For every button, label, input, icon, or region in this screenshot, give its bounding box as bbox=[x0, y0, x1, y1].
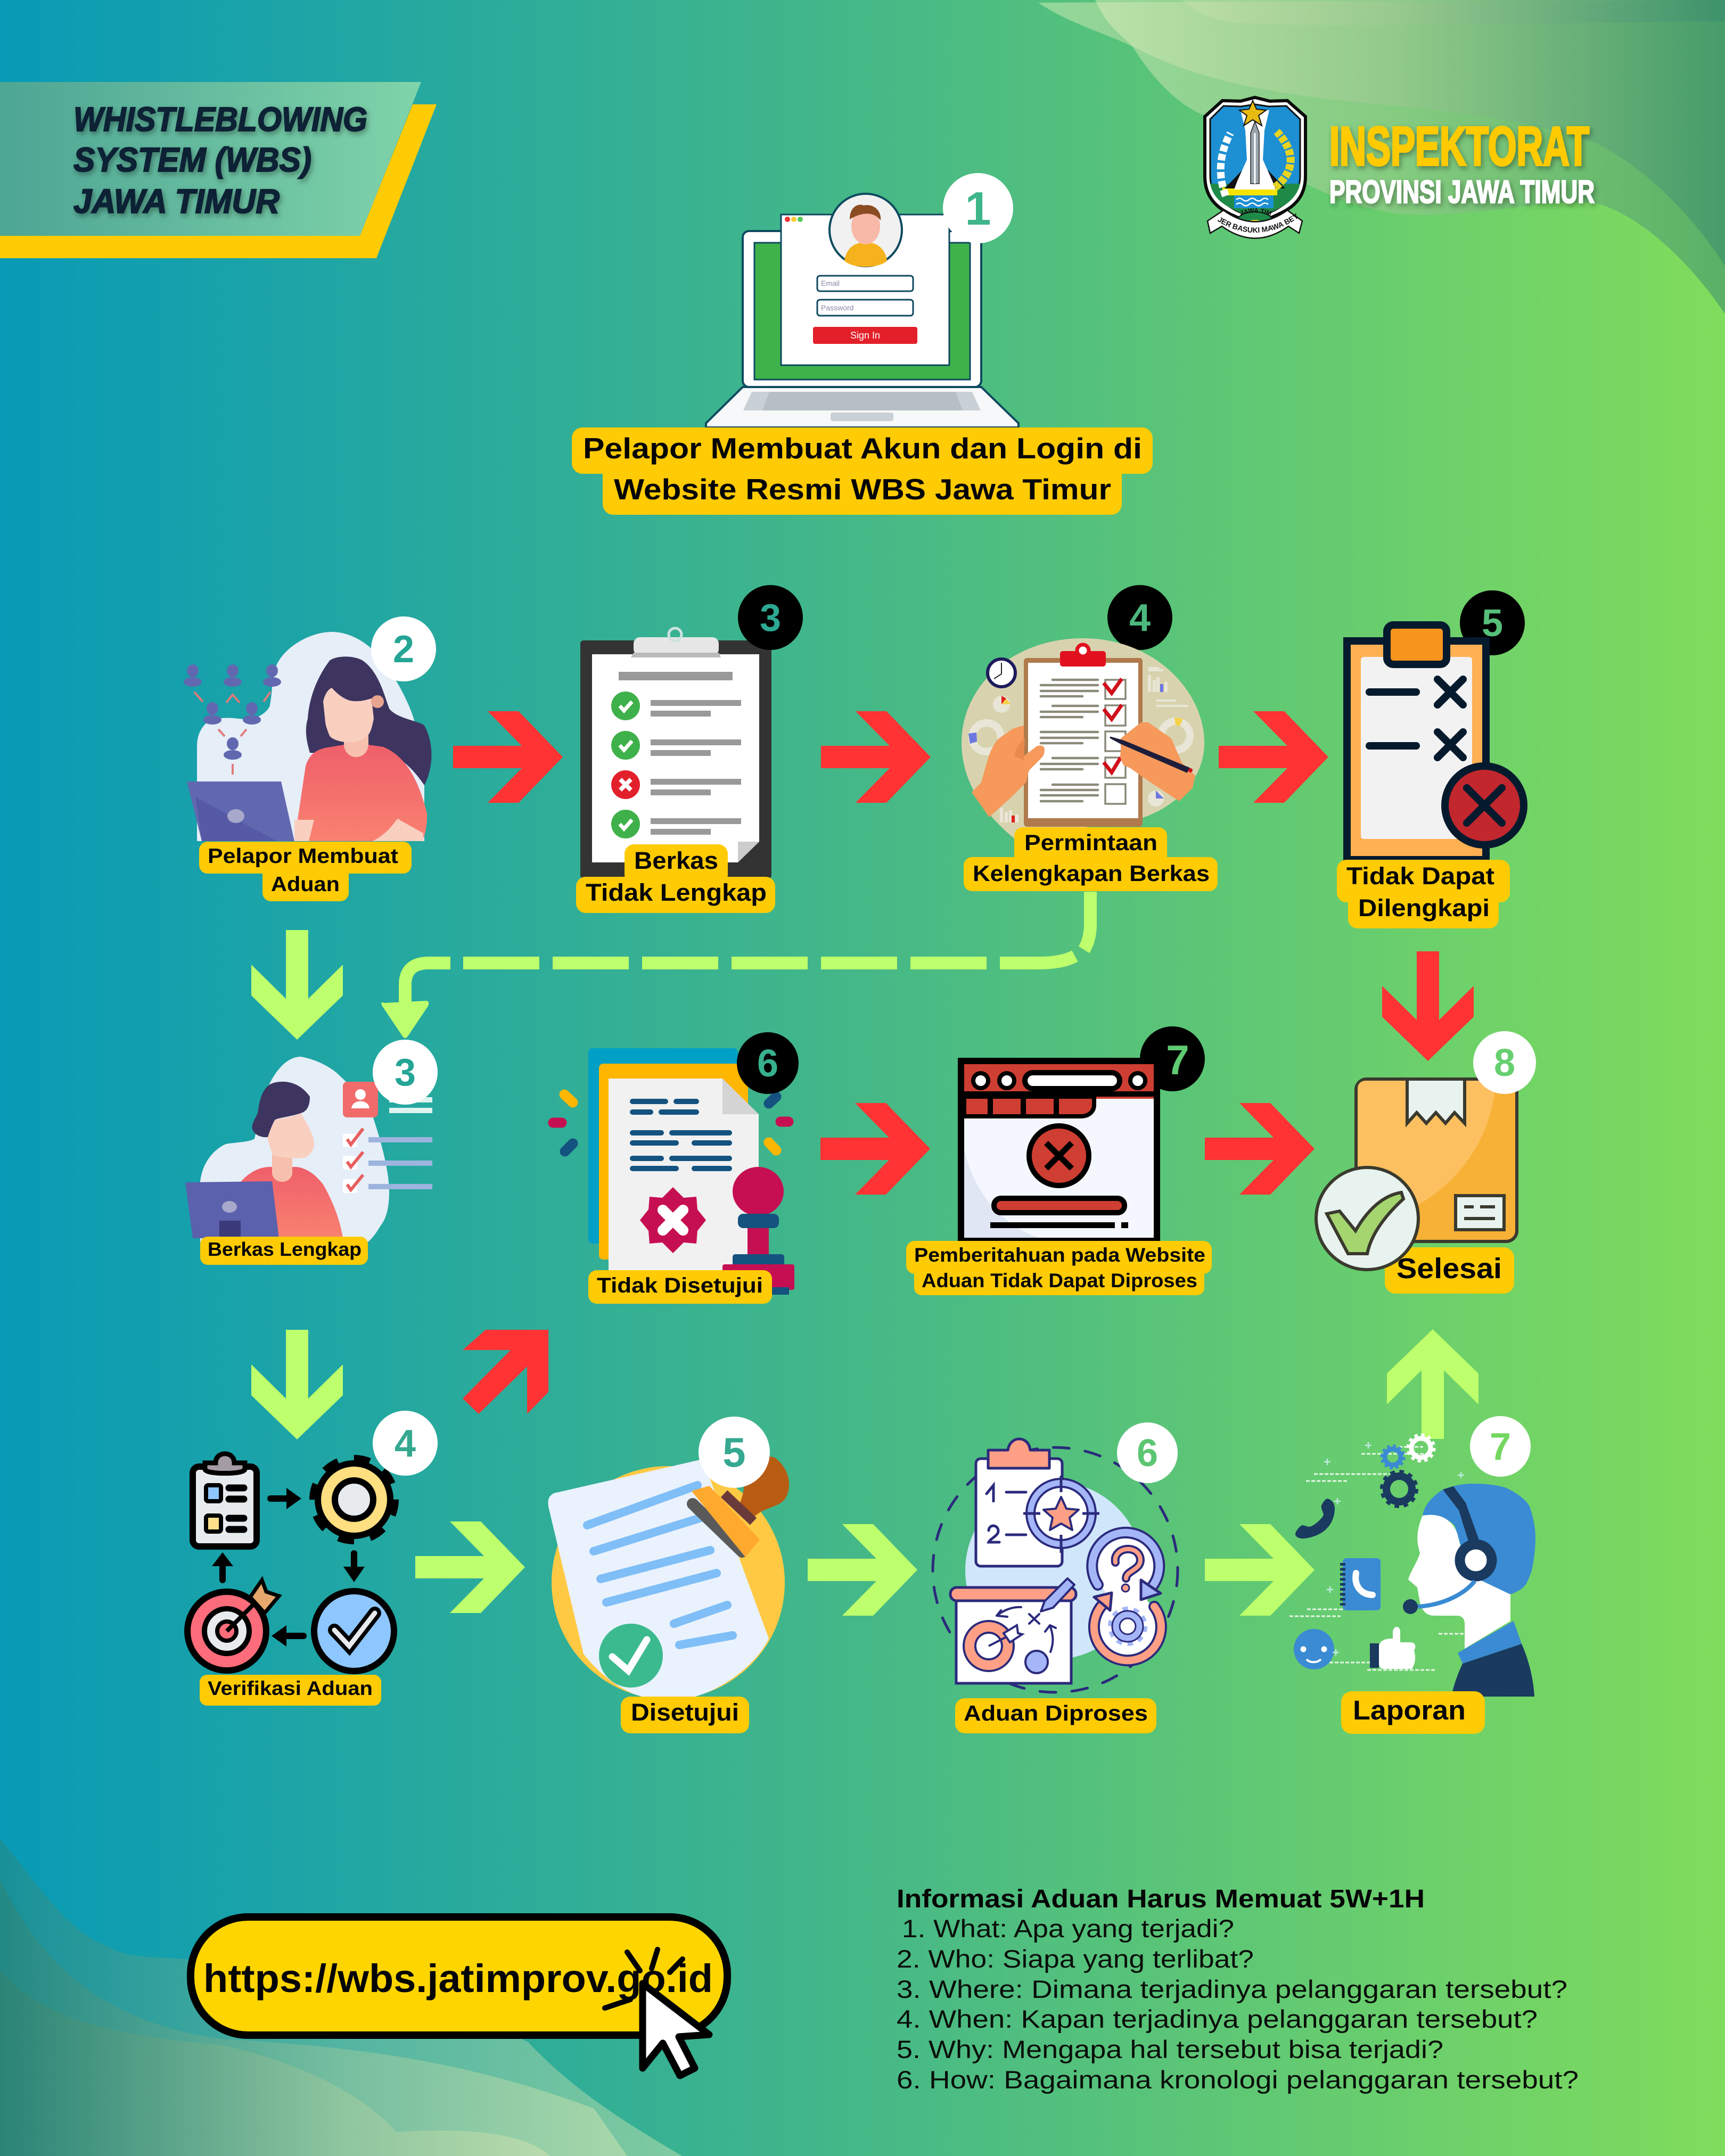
badge 1: 1 bbox=[965, 182, 991, 235]
checklist rows bbox=[651, 700, 741, 835]
title banner bbox=[0, 82, 437, 258]
strategy board bbox=[950, 1578, 1076, 1683]
smiley bbox=[1294, 1629, 1334, 1669]
document lines bbox=[632, 1101, 729, 1168]
cycle question and gear bbox=[1092, 1532, 1161, 1660]
dashed arrow: permintaan back to berkas lengkap bbox=[381, 892, 1090, 1038]
badge 4 white bbox=[373, 1411, 438, 1476]
label: tidak disetujui bbox=[588, 1270, 772, 1304]
organisation name bbox=[1329, 116, 1595, 210]
check bbox=[314, 1591, 394, 1671]
step 4 icon: document request bbox=[962, 638, 1204, 838]
label: pemberitahuan: Pemberitahuan pada Website bbox=[914, 1244, 1205, 1266]
badge 6 white: 6 bbox=[1137, 1432, 1158, 1475]
label: aduan diproses: Aduan Diproses bbox=[964, 1701, 1148, 1725]
list of questions: 1. What: Apa yang terjadi? bbox=[902, 1914, 1234, 1943]
label: tidak disetujui: Tidak Disetujui bbox=[597, 1274, 763, 1297]
clipboard bbox=[193, 1454, 257, 1546]
list of questions bbox=[897, 1914, 1579, 2094]
rosette reject mark bbox=[640, 1187, 706, 1253]
label: laporan: Laporan bbox=[1353, 1695, 1466, 1725]
logo: East Java shield bbox=[1203, 96, 1307, 239]
badge 2 bbox=[371, 616, 436, 681]
label: disetujui bbox=[621, 1697, 749, 1733]
stamp bbox=[692, 1456, 789, 1557]
badge 3 black: 3 bbox=[760, 597, 781, 639]
badge 5 black bbox=[1460, 590, 1525, 655]
dashed lines bbox=[1289, 1447, 1464, 1670]
title text: SYSTEM (WBS) bbox=[73, 141, 311, 179]
label: verifikasi aduan bbox=[200, 1675, 381, 1706]
list of questions: 5. Why: Mengapa hal tersebut bisa terjadi? bbox=[897, 2035, 1443, 2063]
background charts bbox=[968, 668, 1190, 822]
badge 4 white: 4 bbox=[395, 1422, 416, 1465]
list of questions: 6. How: Bagaimana kronologi pelanggaran tersebut? bbox=[897, 2066, 1579, 2094]
decorative wave: bottom left bbox=[0, 1838, 682, 2156]
step 4 icon: verification cycle bbox=[187, 1454, 394, 1671]
badge 7 black: 7 bbox=[1166, 1036, 1189, 1083]
website url button: https://wbs.jatimprov.go.id bbox=[203, 1956, 713, 2001]
arrow: verifikasi to disetujui bbox=[415, 1521, 525, 1613]
label: berkas tidak lengkap: Tidak Lengkap bbox=[586, 879, 767, 906]
organisation name: PROVINSI JAWA TIMUR bbox=[1329, 174, 1595, 210]
arrow: step 2 to berkas tidak lengkap bbox=[453, 711, 563, 803]
thumbs up bbox=[1370, 1627, 1415, 1669]
badge 8: 8 bbox=[1494, 1042, 1515, 1084]
sparks bbox=[553, 1095, 788, 1151]
badge 4 black bbox=[1107, 585, 1172, 650]
label: selesai: Selesai bbox=[1397, 1253, 1502, 1285]
label: tidak dapat dilengkapi: Dilengkapi bbox=[1358, 894, 1490, 921]
login fields: Password bbox=[821, 303, 853, 312]
list of questions: 2. Who: Siapa yang terlibat? bbox=[897, 1945, 1254, 1973]
arrow: step 2 down to berkas lengkap bbox=[251, 930, 343, 1040]
badge 1 bbox=[943, 173, 1013, 243]
label: step 2: Aduan bbox=[271, 873, 340, 896]
login fields: Email bbox=[821, 279, 840, 287]
title text: JAWA TIMUR bbox=[73, 182, 280, 220]
website url button bbox=[191, 1917, 727, 2076]
checklist bbox=[343, 1129, 432, 1193]
label: step 1: Website Resmi WBS Jawa Timur bbox=[614, 473, 1111, 506]
arrow: to pemberitahuan bbox=[820, 1103, 930, 1195]
badge 6 white bbox=[1117, 1422, 1178, 1483]
sparkle plus marks bbox=[1324, 1442, 1464, 1656]
arrow: aduan diproses to laporan bbox=[1205, 1524, 1315, 1616]
label: laporan bbox=[1341, 1691, 1485, 1734]
badge 3 white bbox=[373, 1040, 438, 1105]
stamp bbox=[722, 1167, 794, 1295]
label: step 2: Pelapor Membuat bbox=[208, 845, 398, 868]
label: permintaan kelengkapan berkas bbox=[964, 827, 1218, 891]
arrow: laporan up to selesai bbox=[1387, 1329, 1478, 1439]
arrow: to tidak dapat dilengkapi bbox=[1219, 711, 1328, 803]
badge 2: 2 bbox=[393, 628, 414, 671]
label: aduan diproses bbox=[955, 1698, 1156, 1733]
network people bbox=[184, 664, 281, 760]
clock bbox=[988, 659, 1015, 687]
badge 8 bbox=[1473, 1031, 1536, 1094]
label: berkas tidak lengkap: Berkas bbox=[634, 847, 718, 874]
decorative wave: top right bbox=[1038, 0, 1725, 314]
arrow: disetujui to aduan diproses bbox=[808, 1524, 917, 1616]
label: berkas lengkap: Berkas Lengkap bbox=[208, 1238, 362, 1260]
arrow: to selesai bbox=[1205, 1103, 1315, 1195]
label: pemberitahuan: Aduan Tidak Dapat Diproses bbox=[922, 1270, 1197, 1291]
organisation name: INSPEKTORAT bbox=[1329, 116, 1589, 177]
label: step 1: Pelapor Membuat Akun dan Login di bbox=[583, 432, 1142, 465]
list of questions: 4. When: Kapan terjadinya pelanggaran tersebut? bbox=[897, 2005, 1538, 2033]
gear bbox=[316, 1461, 392, 1538]
badge 6 black bbox=[737, 1032, 799, 1094]
step 5 icon: clipboard rejected bbox=[1347, 625, 1524, 860]
arrow: dilengkapi down to selesai bbox=[1382, 951, 1474, 1061]
icon: mouse cursor bbox=[605, 1949, 709, 2076]
step 3 icon: clipboard incomplete bbox=[580, 628, 771, 878]
step 6 icon: complaint processed bbox=[933, 1439, 1178, 1692]
login fields: Sign In bbox=[850, 330, 880, 341]
label: disetujui: Disetujui bbox=[631, 1699, 739, 1726]
badge 3 black bbox=[738, 585, 803, 650]
badge 6 black: 6 bbox=[757, 1042, 778, 1085]
cycle arrows bbox=[223, 1499, 354, 1636]
arrow: step 3 down to verifikasi bbox=[251, 1330, 343, 1439]
clipboard bbox=[976, 1439, 1099, 1566]
label: verifikasi aduan: Verifikasi Aduan bbox=[208, 1677, 373, 1699]
label: tidak dapat dilengkapi: Tidak Dapat bbox=[1346, 862, 1494, 890]
step 2 icon: reporter woman bbox=[184, 632, 431, 841]
label: step 2 bbox=[199, 842, 412, 901]
step 1 icon: laptop login bbox=[706, 194, 1018, 427]
hands and pen bbox=[972, 726, 1045, 817]
label: pemberitahuan bbox=[906, 1241, 1212, 1295]
info block: 5W+1H bbox=[897, 1885, 1579, 2094]
gears bbox=[1382, 1435, 1434, 1507]
label: step 1 bbox=[572, 427, 1153, 515]
label: tidak dapat dilengkapi bbox=[1337, 860, 1510, 928]
phone bbox=[1295, 1499, 1335, 1538]
logo: East Java shield: JAWA TIMUR bbox=[1241, 208, 1271, 216]
badge 7 white: 7 bbox=[1490, 1426, 1511, 1468]
label: selesai bbox=[1385, 1247, 1514, 1294]
avatar bbox=[829, 194, 902, 267]
step 6 icon: rejected document and stamp bbox=[553, 1048, 794, 1295]
check rows bbox=[1041, 680, 1098, 801]
label: permintaan kelengkapan berkas: Kelengkapan Berkas bbox=[973, 861, 1210, 886]
badge 5 white: 5 bbox=[722, 1429, 746, 1476]
label: berkas tidak lengkap bbox=[576, 844, 775, 913]
title text: WHISTLEBLOWING bbox=[73, 100, 367, 138]
step 8 icon: finished box bbox=[1316, 1079, 1517, 1270]
arrow: to permintaan bbox=[821, 711, 931, 803]
login fields bbox=[813, 276, 917, 344]
step 7 icon: customer service report bbox=[1289, 1435, 1535, 1697]
target bbox=[187, 1580, 279, 1671]
step 7 icon: browser error bbox=[961, 1061, 1157, 1241]
label: berkas lengkap bbox=[200, 1237, 368, 1265]
badge 3 white: 3 bbox=[395, 1051, 416, 1094]
arrow: verifikasi diagonal to tidak disetujui bbox=[463, 1330, 548, 1414]
list of questions: 3. Where: Dimana terjadinya pelanggaran tersebut? bbox=[897, 1975, 1567, 2003]
label: permintaan kelengkapan berkas: Permintaan bbox=[1024, 830, 1157, 855]
badge 5 white bbox=[699, 1417, 770, 1488]
info block: 5W+1H: Informasi Aduan Harus Memuat 5W+1H bbox=[897, 1885, 1425, 1913]
title text bbox=[73, 100, 367, 220]
step 5 icon: approved document bbox=[548, 1456, 789, 1700]
badge 5 black: 5 bbox=[1482, 602, 1503, 645]
step 3 icon: complete files man bbox=[185, 1057, 432, 1242]
phone book bbox=[1343, 1558, 1381, 1610]
badge 7 black bbox=[1140, 1026, 1205, 1091]
badge 4 black: 4 bbox=[1129, 597, 1151, 639]
badge 7 white bbox=[1470, 1416, 1531, 1477]
